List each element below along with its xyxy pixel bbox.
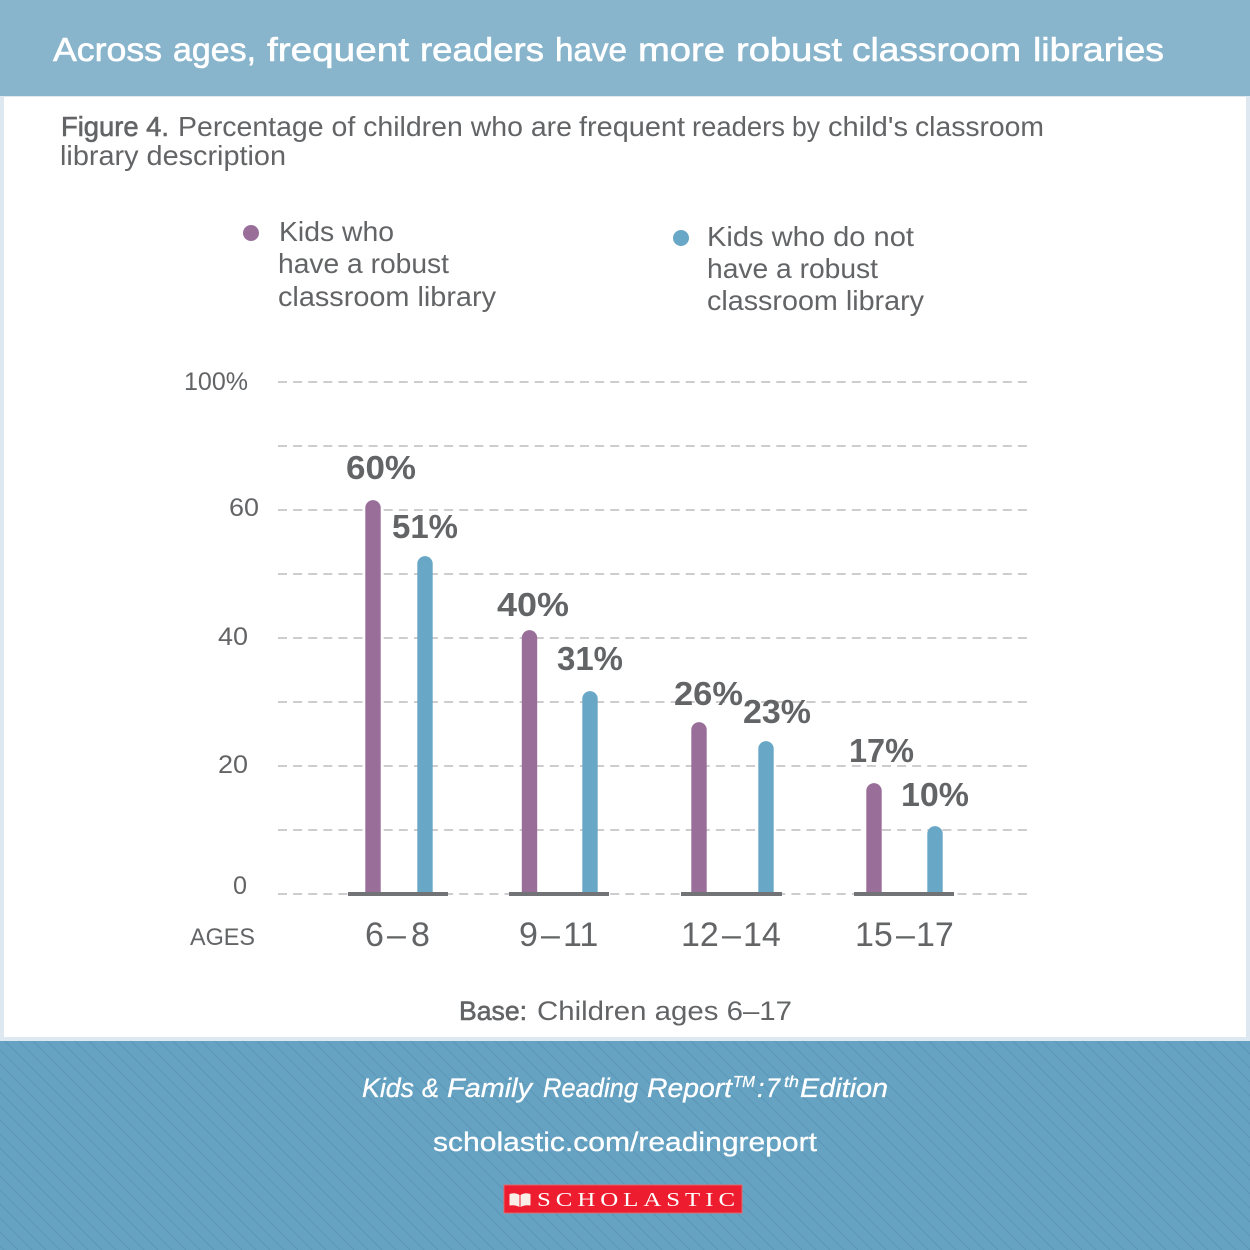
- bars ages 9-11: [509, 630, 609, 896]
- report title: TM: [733, 1074, 756, 1091]
- base note: Children ages 6–17: [537, 996, 792, 1026]
- age group labels: –: [541, 916, 560, 954]
- title: frequent: [267, 31, 409, 68]
- figure caption: child's: [828, 111, 908, 142]
- figure caption: readers: [692, 111, 785, 142]
- icon: open book: [510, 1193, 530, 1207]
- legend: no robust classroom library: have a robust: [707, 253, 878, 284]
- figure caption: frequent: [579, 111, 685, 142]
- title: Across: [53, 31, 162, 68]
- title: robust: [736, 31, 842, 68]
- scholastic logo: SCHOLASTIC: [537, 1189, 740, 1211]
- bars ages 6-8: [348, 500, 448, 896]
- age group labels: –: [387, 916, 406, 954]
- y axis labels: AGES: [190, 924, 255, 951]
- age group labels: 9: [519, 916, 538, 954]
- value labels: 60%: [346, 449, 416, 486]
- report title: 7: [766, 1073, 781, 1103]
- age group labels: –: [896, 916, 915, 954]
- report title: &: [422, 1073, 439, 1103]
- report title: Report: [647, 1073, 734, 1103]
- legend: no robust classroom library: classroom library: [707, 285, 924, 316]
- base note: Base:: [459, 996, 527, 1026]
- title: [53, 31, 1164, 68]
- y axis labels: 100%: [184, 368, 248, 396]
- value labels: 10%: [901, 776, 969, 813]
- bars ages 12-14: [681, 722, 782, 896]
- age group labels: [365, 916, 954, 954]
- title: classroom: [852, 31, 1021, 68]
- value labels: [346, 449, 969, 813]
- title: have: [555, 31, 627, 68]
- report title: :: [757, 1073, 765, 1103]
- legend: robust classroom library: Kids who: [279, 216, 394, 247]
- title: readers: [420, 31, 544, 68]
- legend: no robust classroom library: [673, 221, 924, 316]
- bar chart: [184, 368, 1027, 954]
- legend: robust classroom library: classroom library: [278, 281, 496, 312]
- figure caption: Figure 4.: [61, 111, 169, 142]
- title: ages,: [173, 31, 256, 68]
- age group labels: 14: [743, 916, 781, 954]
- age group labels: 12: [681, 916, 719, 954]
- value labels: 40%: [497, 586, 569, 623]
- legend: robust classroom library: [243, 216, 496, 312]
- scholastic logo: [504, 1185, 742, 1213]
- bars ages 15-17: [854, 783, 954, 896]
- legend: no robust classroom library: Kids who do not: [707, 221, 914, 252]
- value labels: 26%: [674, 675, 743, 712]
- value labels: 17%: [849, 732, 914, 769]
- y axis labels: 40: [218, 623, 248, 651]
- figure caption: [60, 111, 1044, 171]
- age group labels: 17: [916, 916, 954, 954]
- y axis labels: 0: [233, 872, 247, 900]
- figure caption: classroom: [915, 111, 1044, 142]
- report title: Edition: [800, 1073, 888, 1103]
- title: more: [638, 31, 725, 68]
- age group labels: 11: [563, 916, 598, 954]
- header banner: [0, 0, 1250, 96]
- report title: th: [784, 1074, 799, 1091]
- y axis labels: 20: [218, 751, 248, 779]
- legend: robust classroom library: have a robust: [278, 248, 449, 279]
- value labels: 51%: [392, 508, 458, 545]
- age group labels: 15: [855, 916, 893, 954]
- report title: Family: [447, 1073, 534, 1103]
- figure caption: Percentage of children who are: [178, 111, 572, 142]
- figure caption: by: [792, 111, 820, 142]
- value labels: 23%: [743, 693, 811, 730]
- figure caption: library description: [60, 140, 286, 171]
- report title: Kids: [362, 1073, 414, 1103]
- report title: Reading: [543, 1073, 638, 1103]
- age group labels: 8: [411, 916, 430, 954]
- y axis labels: [184, 368, 259, 951]
- y axis labels: 60: [229, 494, 259, 522]
- report title: [362, 1073, 888, 1103]
- title: libraries: [1033, 31, 1164, 68]
- age group labels: –: [722, 916, 741, 954]
- age group labels: 6: [365, 916, 384, 954]
- footer band: [0, 1041, 1250, 1250]
- report url: scholastic.com/readingreport: [433, 1127, 818, 1157]
- value labels: 31%: [557, 640, 623, 677]
